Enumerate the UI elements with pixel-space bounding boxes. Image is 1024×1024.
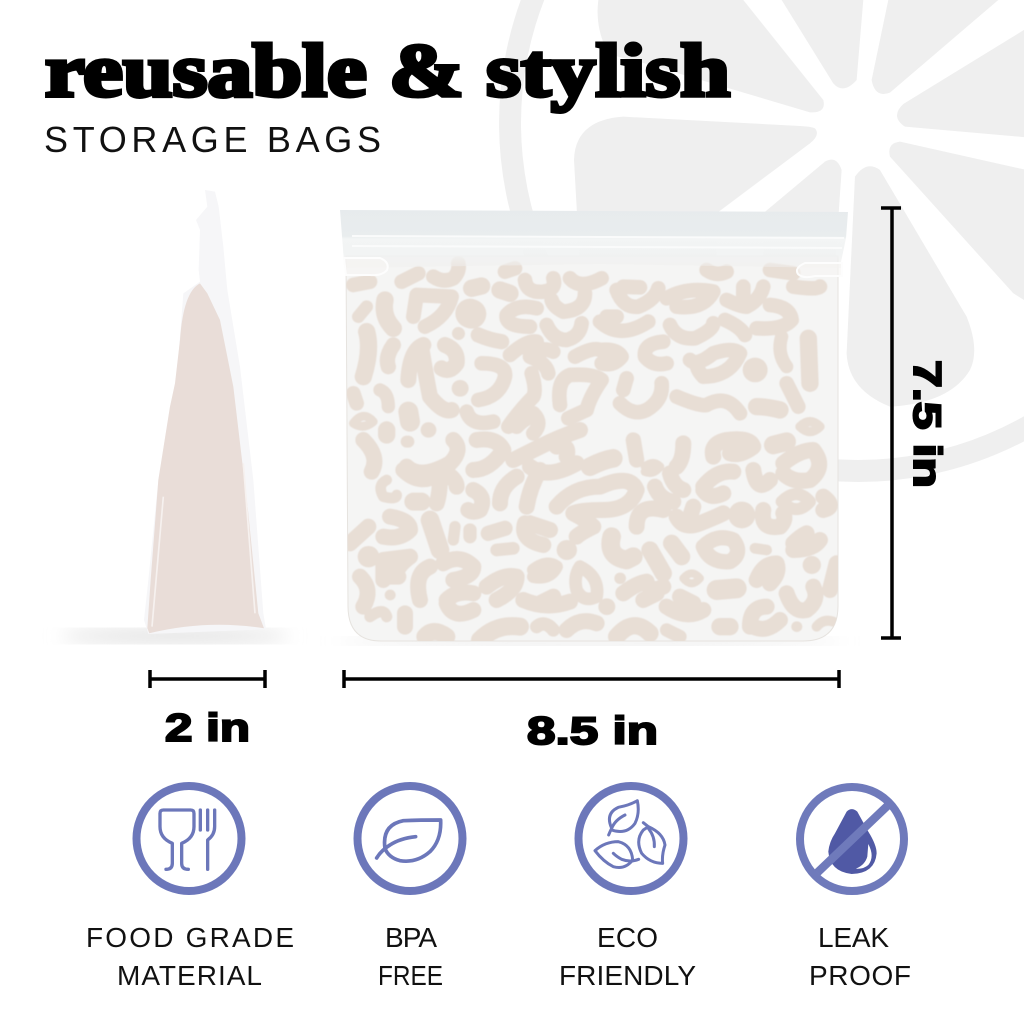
zipper notch left xyxy=(344,258,388,275)
background lemon slice graphic xyxy=(499,0,1024,482)
icon: three leaves xyxy=(578,786,684,891)
dimension: depth 2 in: 2 in xyxy=(165,707,250,750)
label: bpa free xyxy=(378,922,443,991)
label: food grade material: MATERIAL xyxy=(117,960,262,991)
label: food grade material xyxy=(86,922,294,991)
label: leak proof: PROOF xyxy=(809,960,911,991)
title: reusable & stylish xyxy=(45,30,730,113)
dimension: depth 2 in xyxy=(150,670,265,750)
icon: no leak water drop xyxy=(800,787,904,891)
zipper notch right xyxy=(797,263,842,277)
side view bag xyxy=(60,190,290,643)
label: eco friendly xyxy=(559,922,696,991)
dimension: width 8.5 in: 8.5 in xyxy=(527,710,658,753)
label: food grade material: FOOD GRADE xyxy=(86,922,294,953)
label: leak proof xyxy=(809,922,911,991)
label: eco friendly: FRIENDLY xyxy=(559,960,696,991)
label: leak proof: LEAK xyxy=(818,922,889,953)
subtitle: STORAGE BAGS xyxy=(44,119,381,160)
dimension: width 8.5 in xyxy=(344,670,839,753)
label: eco friendly: ECO xyxy=(597,922,658,953)
label: bpa free: FREE xyxy=(378,960,443,991)
icon: food grade glass and fork xyxy=(136,786,242,891)
front view bag xyxy=(335,210,848,645)
bag shadow xyxy=(335,637,845,645)
label: bpa free: BPA xyxy=(385,922,437,953)
dimension: height 7.5 in xyxy=(881,208,948,638)
leopard print pattern xyxy=(350,263,837,640)
dimension: height 7.5 in: 7.5 in xyxy=(905,360,948,488)
icon: single leaf xyxy=(358,786,462,891)
zipper top band xyxy=(340,210,848,268)
bag body xyxy=(346,256,838,641)
